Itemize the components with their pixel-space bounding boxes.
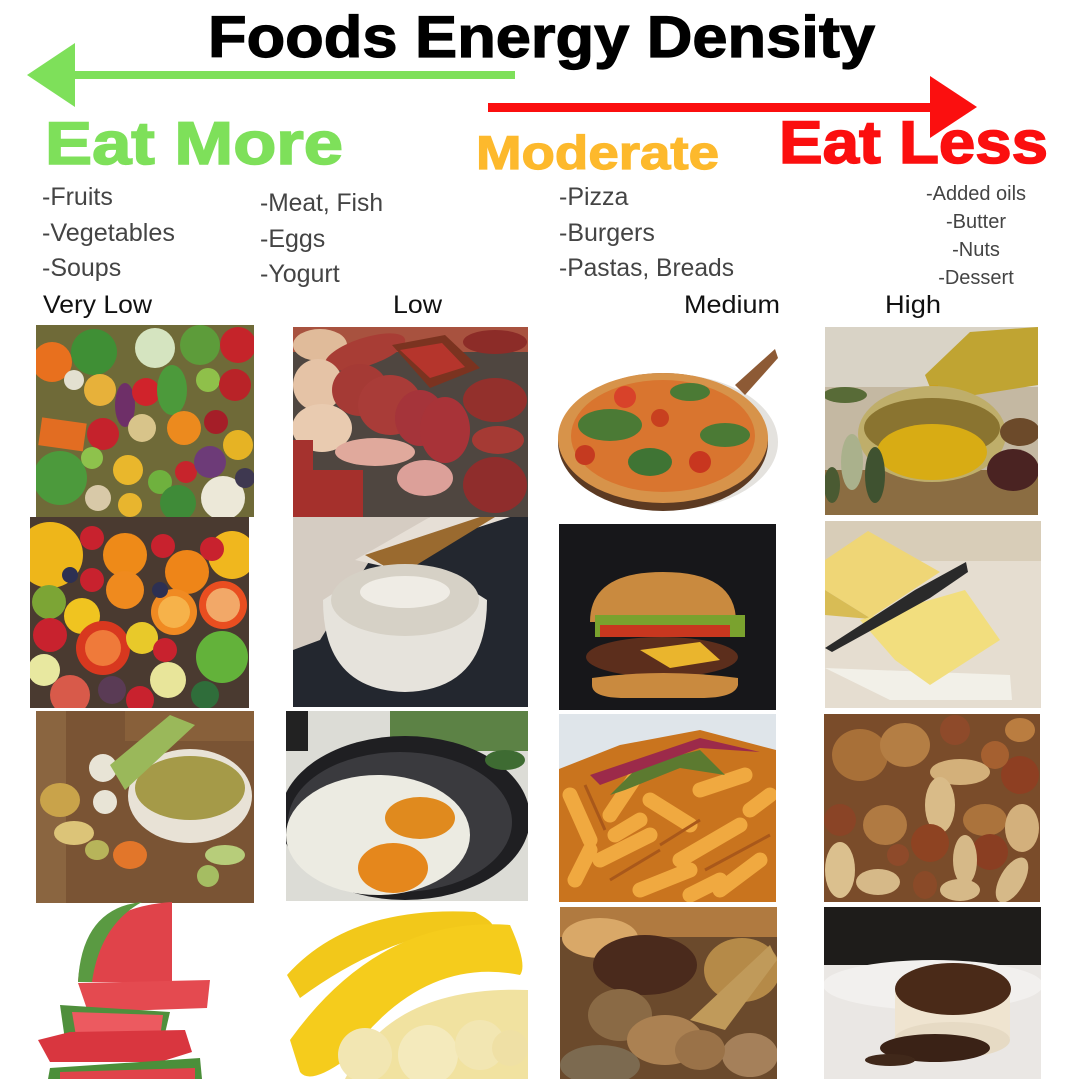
photo: bananas <box>287 911 528 1079</box>
list: very low foods: -Vegetables <box>42 219 175 247</box>
column label: High: High <box>885 291 941 319</box>
photo: fried eggs <box>280 711 530 901</box>
column label: Very Low: Very Low <box>43 291 153 319</box>
list: high foods: -Butter <box>946 211 1006 233</box>
list: very low foods <box>42 183 175 282</box>
list: high foods: -Added oils <box>926 183 1026 205</box>
photo: mixed nuts <box>824 714 1040 908</box>
photo: mixed vegetables <box>32 325 256 521</box>
list: high foods: -Nuts <box>952 239 1000 261</box>
heading: Moderate: Moderate <box>476 126 719 179</box>
column label: Low: Low <box>393 291 443 319</box>
title: Foods Energy Density <box>208 5 875 70</box>
photo: watermelon stack <box>38 902 210 1079</box>
list: medium foods <box>559 183 734 282</box>
list: high foods <box>926 183 1026 289</box>
list: medium foods: -Pastas, Breads <box>559 254 734 282</box>
list: low foods: -Yogurt <box>260 260 340 288</box>
photo: burger <box>559 524 776 710</box>
heading: Eat Less: Eat Less <box>779 109 1048 176</box>
photo: penne pasta <box>559 714 776 902</box>
arrow: green pointing left <box>27 43 515 107</box>
photo: breads <box>560 907 780 1079</box>
photo: olive oil <box>823 327 1040 515</box>
list: low foods <box>260 189 383 288</box>
photo: vegetable soup <box>36 711 254 903</box>
photo: chocolate dessert <box>823 907 1043 1079</box>
list: low foods: -Meat, Fish <box>260 189 383 217</box>
arrow: red pointing right <box>488 76 977 138</box>
photo: raw meat <box>292 326 528 517</box>
list: medium foods: -Burgers <box>559 219 655 247</box>
list: high foods: -Dessert <box>938 267 1014 289</box>
photo: yogurt bowl <box>293 517 528 707</box>
list: low foods: -Eggs <box>260 225 325 253</box>
list: medium foods: -Pizza <box>559 183 629 211</box>
photo: butter <box>825 521 1041 708</box>
photo: mixed fruits <box>30 517 249 708</box>
photo: pizza <box>558 349 778 511</box>
column label: Medium: Medium <box>684 291 780 319</box>
heading: Eat More: Eat More <box>45 110 343 177</box>
list: very low foods: -Soups <box>42 254 121 282</box>
list: very low foods: -Fruits <box>42 183 113 211</box>
